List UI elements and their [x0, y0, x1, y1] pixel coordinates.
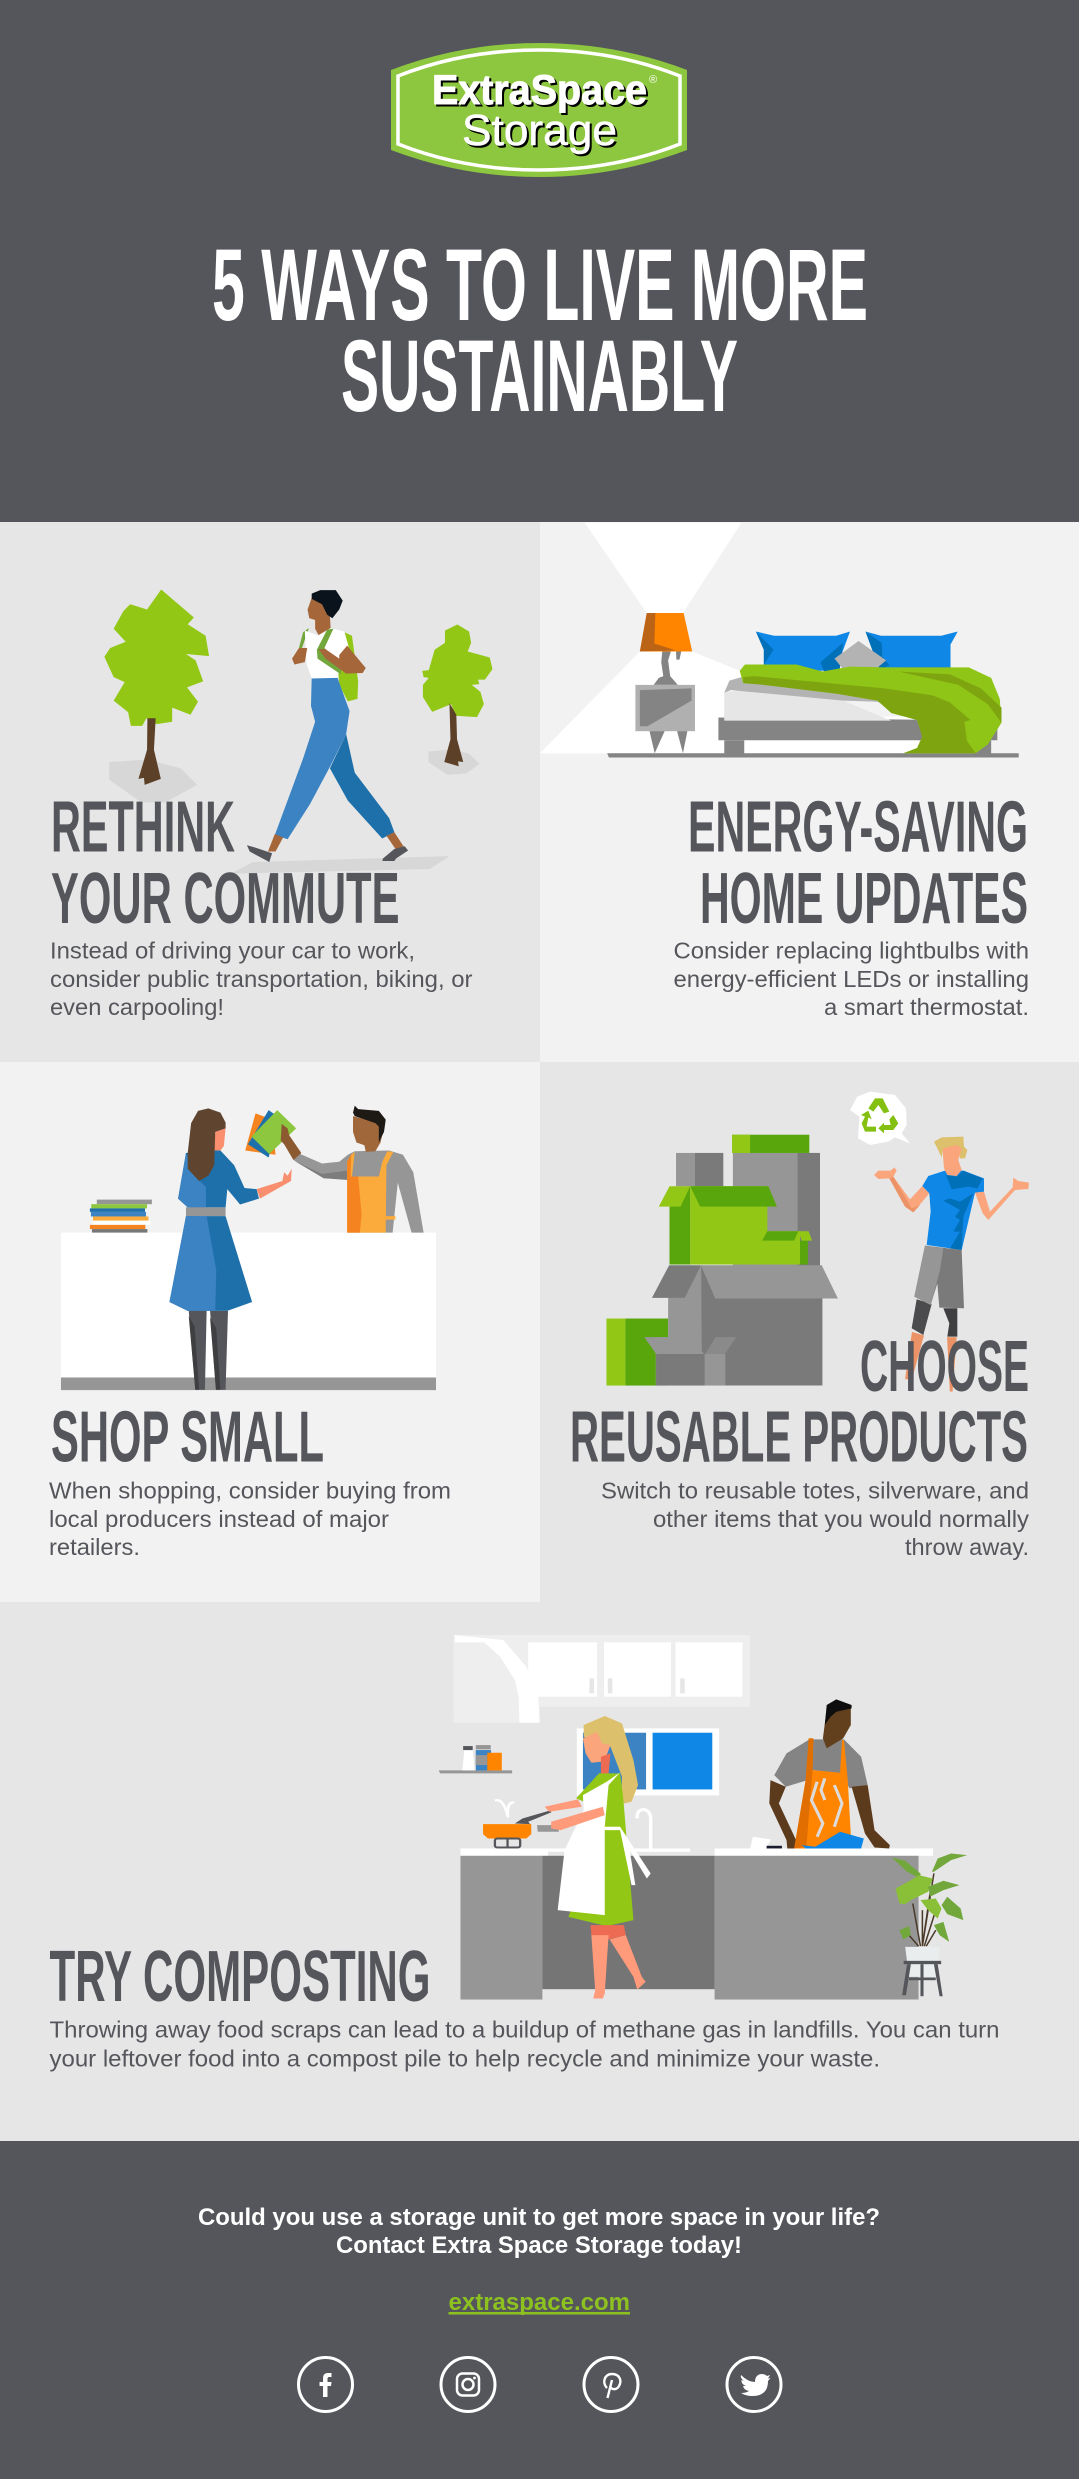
body text: Throwing away food scraps can lead to a buildup of methane gas in landfills. You can turn: [50, 2016, 1000, 2042]
body text: [50, 2016, 1000, 2072]
body text: Switch to reusable totes, silverware, and: [601, 1478, 1029, 1504]
call to action text: Contact Extra Space Storage today!: [336, 2232, 742, 2259]
heading: YOUR COMMUTE: [51, 858, 400, 939]
icon: pinterest: [584, 2358, 638, 2412]
call to action text: Could you use a storage unit to get more space in your life?: [198, 2204, 880, 2231]
panel: energy-saving home updates: [540, 522, 1079, 1062]
body text: Instead of driving your car to work,: [50, 938, 415, 964]
logo: Extra Space Storage: Storage: [462, 106, 617, 155]
body text: When shopping, consider buying from: [49, 1478, 451, 1504]
heading: [51, 786, 400, 939]
body text: retailers.: [49, 1534, 140, 1560]
panel: rethink your commute: [0, 522, 540, 1062]
body text: [601, 1478, 1029, 1560]
website link: extraspace.com: [448, 2289, 630, 2316]
heading: [688, 786, 1028, 939]
heading: [570, 1326, 1029, 1478]
body text: throw away.: [905, 1534, 1029, 1560]
logo: Extra Space Storage: ®: [649, 74, 657, 86]
icon: instagram: [441, 2358, 495, 2412]
body text: energy-efficient LEDs or installing: [674, 966, 1029, 992]
illustration: kitchen: [439, 1635, 967, 2000]
body text: local producers instead of major: [49, 1506, 389, 1532]
call to action text: [198, 2204, 880, 2259]
logo: Extra Space Storage: [391, 43, 687, 177]
panel: shop small: [0, 1062, 540, 1602]
illustration: shop counter: [61, 1106, 436, 1390]
title: [212, 228, 868, 433]
body text: [50, 938, 473, 1020]
illustration: bedroom with lamp: [540, 523, 1019, 757]
heading: SHOP SMALL: [51, 1396, 324, 1478]
body text: consider public transportation, biking, or: [50, 966, 473, 992]
illustration: man with speech bubble: [850, 1092, 1029, 1337]
body text: a smart thermostat.: [824, 994, 1029, 1020]
heading: RETHINK: [51, 786, 235, 868]
panel: try composting: [0, 1602, 1079, 2141]
panel: choose reusable products: [540, 1062, 1079, 1602]
body text: your leftover food into a compost pile to help recycle and minimize your waste.: [50, 2046, 880, 2072]
header panel: [0, 0, 1079, 522]
body text: Consider replacing lightbulbs with: [674, 938, 1029, 964]
body text: [674, 938, 1029, 1020]
icon: twitter: [727, 2358, 781, 2412]
footer panel: [0, 2141, 1079, 2479]
logo: Extra Space Storage: ExtraSpace: [432, 66, 647, 113]
title: SUSTAINABLY: [341, 319, 738, 433]
heading: TRY COMPOSTING: [50, 1936, 431, 2017]
body text: even carpooling!: [50, 994, 224, 1020]
icon: facebook: [298, 2358, 352, 2412]
illustration: walker and trees: [104, 589, 492, 874]
illustration: stacked boxes: [606, 1135, 957, 1392]
body text: other items that you would normally: [653, 1506, 1029, 1532]
body text: [49, 1478, 451, 1560]
